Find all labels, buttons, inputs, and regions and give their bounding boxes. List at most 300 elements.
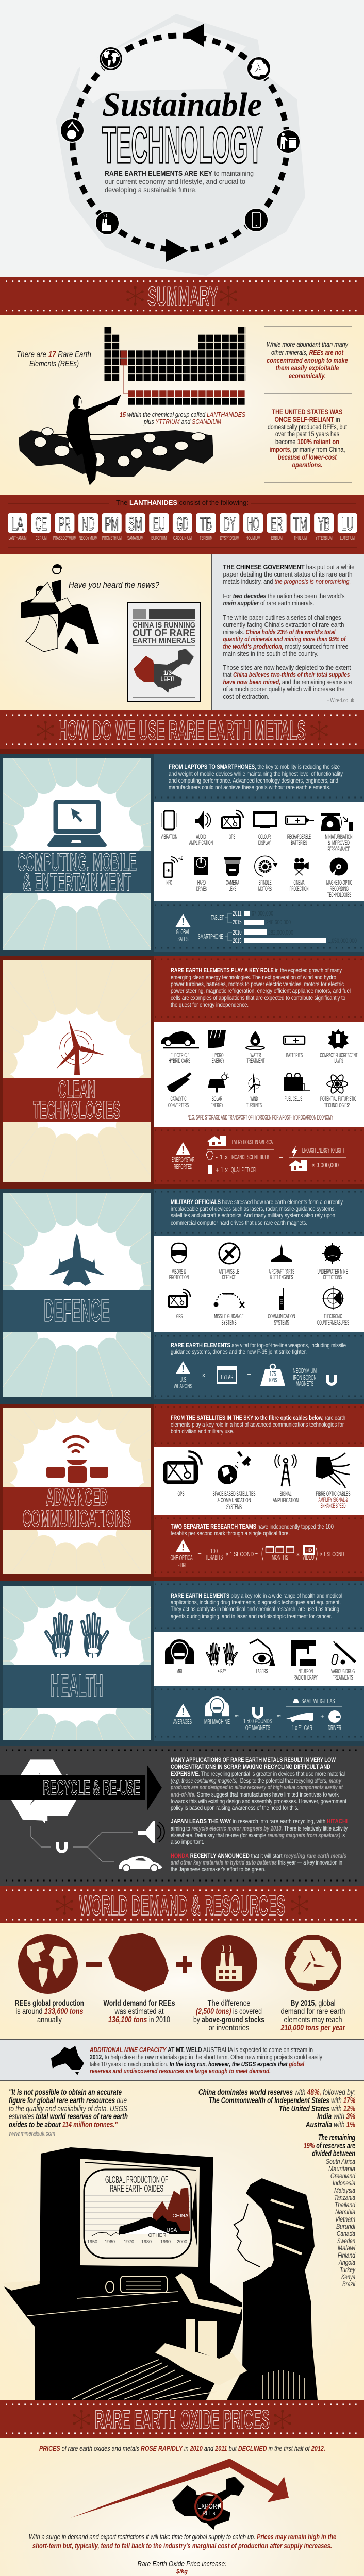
global sales chart: TABLET [211, 913, 224, 921]
reserves by country: Vietnam [335, 2215, 355, 2223]
section: advanced communications [0, 1404, 364, 1581]
summary decoration [127, 286, 143, 305]
mri equation: ≈ [235, 1712, 239, 1720]
tv screen chart: 1950 [87, 2239, 97, 2244]
icon: gps [168, 1289, 190, 1308]
element names: LANTHANUM [8, 535, 27, 541]
mri equation: + [320, 1713, 324, 1720]
energystar equation: REPORTED [174, 1163, 192, 1171]
australia band [0, 2039, 364, 2081]
icon: speaker [138, 1821, 164, 1843]
panel: defence [3, 1193, 151, 1397]
tv screen chart [84, 2170, 191, 2258]
recycle title arrow: RECYCLE & RE-USE [43, 1775, 140, 1800]
terabit text: terabits per second mark through a single optical fibre. [171, 1530, 290, 1537]
map: china [134, 649, 194, 693]
price chart title: Rare Earth Oxide Price increase: [137, 2560, 227, 2568]
icon: water drop [246, 1031, 264, 1050]
icon: solar [208, 1072, 229, 1092]
banner: how do we use rare earth metals [0, 710, 364, 754]
communications labels: SIGNAL [279, 1491, 292, 1497]
demand captions: REEs global production [15, 1999, 84, 2008]
fact: united states: operations. [292, 461, 323, 469]
communications icon grid [154, 1447, 364, 1515]
icon: calendar [217, 1366, 237, 1384]
fact: abundance: them easily exploitable [275, 364, 339, 372]
element names: EUROPIUM [151, 535, 167, 541]
icon: electric car [161, 1031, 199, 1048]
icon: radar [322, 1286, 344, 1310]
defence labels: AIRCRAFT PARTS [269, 1269, 294, 1275]
terabit equation: ONE OPTICAL [170, 1554, 195, 1562]
red lanthanide row [128, 390, 245, 397]
article text: cost of extraction. [223, 692, 269, 700]
price chart title [137, 2560, 227, 2575]
australia text: ADDITIONAL MINE CAPACITY AT MT. WELD AUSTRALIA is expected to come on stream in [89, 2046, 313, 2054]
demand captions: was estimated at [114, 2007, 164, 2016]
recycle text: policy is based upon raising awareness of the need for this. [171, 1804, 299, 1811]
decoration [56, 1896, 73, 1914]
woman hair [246, 2178, 315, 2272]
icon: phone [244, 208, 269, 232]
recycle text: also important. [171, 1838, 204, 1845]
defence labels: SYSTEMS [222, 1320, 237, 1326]
clean labels: LAMPS [334, 1058, 343, 1064]
clean labels: ENERGY [212, 1058, 224, 1064]
area: other [123, 2226, 171, 2234]
article text: the world's production, mostly sourced from three [223, 642, 349, 650]
communications title banner: ADVANCED [46, 1484, 108, 1511]
icon: nfc [164, 856, 183, 877]
terabit equation [170, 1539, 344, 1569]
recycle text: elsewhere. Defra say that re-use (for example reusing magnets from speakers) is [171, 1832, 345, 1839]
supply text [29, 2533, 336, 2550]
lanthanide connector [124, 365, 128, 394]
clean labels: HYDRO [212, 1053, 224, 1059]
clean labels: BATTERIES [286, 1053, 303, 1059]
clean labels [168, 1053, 358, 1109]
clean text: RARE EARTH ELEMENTS PLAY A KEY ROLE in the expected growth of many [171, 967, 342, 974]
recycle text: (e.g. those containing magnets). Despite the potential that recycling offers, many [171, 1777, 342, 1784]
tv bezel [80, 2159, 200, 2267]
icon: batteries [284, 1036, 305, 1044]
mri equation: DRIVER [328, 1724, 341, 1732]
map: china export ban: EXPORT [197, 2502, 220, 2510]
plus [176, 1956, 192, 1973]
global sales chart: SMARTPHONE [198, 933, 223, 940]
text: 17 REEs: There are 17 Rare Earth [16, 350, 91, 359]
section: defence [0, 1189, 364, 1404]
fact: united states [268, 408, 347, 469]
reserves by country: Thailand [335, 2200, 356, 2209]
news panel left [0, 554, 211, 710]
reserves by country: Sweden [337, 2236, 355, 2245]
section background [0, 1189, 364, 1404]
intro text: RARE EARTH ELEMENTS ARE KEY to maintaining [105, 170, 254, 177]
article text: metals industry, and the prognosis is not promising. [223, 578, 351, 585]
newspaper [128, 603, 200, 701]
computing title banner: & ENTERTAINMENT [23, 869, 131, 896]
intro text [105, 170, 254, 194]
element tiles: TM [293, 513, 307, 534]
mri equation: ≈ [277, 1712, 281, 1720]
icon: magnet [327, 1375, 336, 1384]
icon: neutron radiotherapy [291, 1640, 316, 1666]
health labels: MRI [176, 1669, 183, 1675]
fact: united states: become 100% reliant on [275, 438, 339, 446]
element tiles: PR [59, 513, 71, 534]
health labels: X-RAY [218, 1669, 226, 1675]
recycle title arrow [0, 1765, 162, 1811]
icon: cinema [294, 858, 308, 875]
icon: f1 car [286, 1713, 313, 1722]
illustration: crowd and speaker [19, 395, 213, 485]
heading: summary: SUMMARY [147, 282, 218, 312]
communications labels: GPS [177, 1491, 185, 1497]
article text: minerals. China holds 23% of the world's total [223, 628, 336, 636]
article text: - Wired.co.uk [327, 698, 354, 704]
defence equation: NEODYMIUM [293, 1367, 317, 1375]
computing labels: HARD [197, 880, 206, 886]
article text: main supplier of rare earth minerals. [223, 599, 315, 607]
computing text: manufacturers could not achieve these goals without rare earth elements. [169, 784, 330, 791]
reserves by country: Indonesia [333, 2179, 355, 2187]
global sales chart: 2015 [233, 937, 241, 944]
computing labels: SPINDLE [259, 880, 272, 886]
icon: globe large [18, 1934, 78, 1994]
reserves panel [0, 2081, 364, 2400]
article text: The white paper outlines a series of challenges [223, 614, 341, 621]
tv ledge [4, 2281, 178, 2316]
icon: weight: TONS [268, 1376, 277, 1384]
computing labels: AUDIO [196, 834, 206, 840]
clean labels: WATER [251, 1053, 261, 1059]
terabit equation: MONTHS [272, 1553, 288, 1561]
element names: DYSPROSIUM [220, 535, 239, 541]
recycle text: aiming to recycle electric motor magnets by 2013. There is relatively little activity [171, 1825, 348, 1832]
icon: helmet [328, 1710, 341, 1723]
lanthanide band [0, 495, 364, 554]
terabit equation: FIBRE [177, 1561, 188, 1569]
element tiles: LA [11, 513, 24, 534]
computing labels: RECHARGEABLE [287, 834, 311, 840]
health icon grid [154, 1632, 364, 1686]
tv screen chart: OTHER [148, 2233, 166, 2239]
global sales chart: 248,600,000 [266, 919, 291, 926]
defence title banner: DEFENCE [44, 1293, 110, 1329]
global sales chart [175, 909, 357, 944]
quote: usgs: oxides to be about 114 million tonnes." [9, 2121, 118, 2129]
quote: usgs [9, 2088, 128, 2137]
icon: lasers [250, 1639, 275, 1666]
communications labels: AMPLIFICATION [273, 1498, 299, 1504]
defence labels: COMMUNICATION [268, 1314, 295, 1320]
fact: abundance [267, 341, 349, 380]
terabit equation: × 1 SECOND [320, 1550, 344, 1558]
section: recycle and re-use [0, 1746, 364, 1886]
defence labels: & JET ENGINES [270, 1275, 293, 1281]
tv screen chart: 1980 [141, 2239, 152, 2244]
computing labels: DISPLAY [258, 840, 271, 846]
defence equation: WEAPONS [174, 1382, 192, 1390]
computing labels: NFC [166, 880, 172, 886]
element tiles: YB [318, 513, 330, 534]
terabit equation: x [296, 1550, 300, 1558]
reserves by country: Namibia [335, 2208, 355, 2216]
icon: nfc: -£ [166, 868, 171, 874]
tv screen chart: CHINA [172, 2213, 189, 2219]
reserves by country: China dominates world reserves with 48%, followed by: [198, 2088, 355, 2097]
icon: mri [165, 1639, 194, 1664]
icon: jet small [271, 1244, 292, 1262]
woman face [234, 2204, 260, 2267]
recycle background [0, 1746, 364, 1886]
map: china export ban: REEs [202, 2509, 216, 2517]
icon: globe [98, 46, 123, 71]
icon: fibre optics [316, 1453, 350, 1488]
icon: radio [279, 1288, 284, 1310]
communications labels: SYSTEMS [226, 1504, 242, 1511]
icon: rock [108, 1933, 169, 1992]
element tiles: DY [224, 513, 236, 534]
recycle text: and other key materials in hybrid auto batteries this year — a key innovation in [171, 1859, 342, 1866]
icon: weight [260, 1364, 285, 1386]
defence labels: PROTECTION [169, 1275, 189, 1281]
quote: usgs: "It is not possible to obtain an accurate [9, 2088, 122, 2097]
element names: NEODYMIUM [79, 535, 97, 541]
clean title banner: CLEAN [58, 1076, 95, 1104]
defence title banner [3, 1290, 151, 1332]
element tiles: SM [128, 513, 142, 534]
communications title banner: COMMUNICATIONS [23, 1505, 131, 1532]
terabit text: TWO SEPARATE RESEARCH TEAMS have independently topped the 100 [171, 1523, 334, 1530]
global sales chart: SALES [177, 935, 189, 943]
defence text: commercial computer hard drives that use rare earth magnets. [171, 1219, 307, 1226]
reserves by country: Turkey [340, 2265, 356, 2274]
icon: calendar: 1 YEAR [221, 1373, 233, 1381]
clean labels: ELECTRIC / [170, 1053, 189, 1059]
icon: gps [163, 1451, 202, 1484]
fact: united states: over the past 15 years has [275, 430, 339, 438]
communications text: both civilian and military use. [171, 1428, 234, 1435]
computing labels: MOTORS [258, 886, 272, 892]
mri equation: 1,500 POUNDS [243, 1717, 272, 1725]
panel: communications [3, 1408, 151, 1574]
energystar equation: QUALIFIED CFL [231, 1166, 257, 1174]
defence weapons text: guidance systems, drones and the new F-35 joint strike fighter. [171, 1348, 307, 1355]
icon: camera lens [224, 857, 241, 876]
health labels: LASERS [256, 1669, 268, 1675]
magnet flow diagram [31, 1821, 164, 1872]
element tiles: ND [82, 513, 95, 534]
icon: hydro [208, 1030, 226, 1048]
icon: calendars [266, 1547, 294, 1553]
ring arrow bottom [166, 239, 188, 262]
defence equation: MAGNETS [296, 1380, 313, 1387]
tv screen chart: 2000 [177, 2239, 187, 2244]
element names: PROMETHIUM [102, 535, 122, 541]
map: china export ban [172, 2477, 244, 2530]
quote: usgs: estimates total world reserves of rare earth [9, 2112, 128, 2121]
clean labels: TURBINES [246, 1103, 262, 1109]
icon: fuel cells [284, 1073, 310, 1091]
icon: visor [171, 1243, 187, 1263]
clean labels: TREATMENT [246, 1058, 265, 1064]
icon: satellite [46, 1436, 108, 1483]
demand captions: The difference [207, 1999, 251, 2008]
health labels: RADIOTHERAPY [294, 1675, 318, 1681]
icon: hard drive [194, 857, 208, 875]
australia text: reserves and undiscovered resources are large enough to meet demand. [90, 2067, 271, 2075]
defence labels: GPS [176, 1314, 183, 1320]
icon: recycle [246, 56, 271, 81]
tv screen chart: 1990 [160, 2239, 171, 2244]
section: clean technologies [0, 956, 364, 1189]
recycle text: HONDA RECENTLY ANNOUNCED that it will start recycling rare earth metals [171, 1852, 346, 1859]
computing labels: LENS [229, 886, 236, 892]
defence labels: SYSTEMS [274, 1320, 289, 1326]
health labels [176, 1669, 355, 1681]
icon: telephone [321, 813, 353, 831]
element names: THULIUM [294, 535, 307, 541]
element names: SAMARIUM [127, 535, 143, 541]
demand captions: (2,500 tons) is covered [196, 2007, 262, 2016]
communications labels: SPACE BASED SATELLITES [212, 1491, 256, 1497]
energystar equation: - 1 x [216, 1153, 228, 1161]
woman arm lap [155, 2343, 247, 2385]
health title banner: HEALTH [51, 1668, 103, 1704]
clean labels: FUEL CELLS [285, 1096, 302, 1103]
computing labels: VIBRATION [161, 834, 177, 840]
article text: THE CHINESE GOVERNMENT has put out a white [223, 563, 355, 571]
right facts [264, 327, 352, 482]
global sales chart: 282,000,000 [268, 929, 293, 936]
supply text: With a surge in demand and export restrictions it will take time for global supply to catch up. Prices may remain high in the [29, 2533, 336, 2541]
fact: abundance: economically. [289, 372, 326, 380]
mri equation: AVERAGES [173, 1718, 192, 1725]
tv screen chart: GLOBAL PRODUCTION OF [105, 2175, 168, 2185]
newspaper headline: CHINA IS RUNNING [133, 621, 195, 630]
computing text: FROM LAPTOPS TO SMARTPHONES, the key to mobility is reducing the size [169, 763, 340, 770]
icon: wind turbine [56, 1019, 105, 1075]
panel: computing [3, 758, 151, 950]
global sales chart: 2010 [233, 928, 241, 936]
article text: currently facing China's extraction of rare earth [223, 621, 344, 629]
icon: wind [248, 1071, 263, 1093]
reserves by country: South Africa [326, 2157, 355, 2165]
icon: spindle [255, 856, 278, 876]
mri equation: OF MAGNETS [245, 1724, 270, 1732]
communications labels [177, 1491, 351, 1511]
reserves by country: Australia with 1% [305, 2121, 355, 2129]
reserves by country: The United States with 12% [279, 2105, 355, 2113]
demand captions: By 2015, global [291, 1999, 335, 2008]
woman arm raised [175, 2273, 242, 2314]
clean icon grid [154, 1022, 364, 1127]
article text: paper detailing the current status of its rare earth [223, 570, 353, 578]
reserves by country: Malawi [338, 2244, 356, 2252]
icon: mine [322, 1243, 343, 1264]
fact: abundance: concentrated enough to make [267, 357, 348, 364]
element names: YTTERBIUM [316, 535, 333, 541]
reserves by country: Burundi [336, 2222, 356, 2230]
computing labels: BATTERIES [291, 840, 307, 846]
element names: GADOLINIUM [173, 535, 192, 541]
global sales chart: 2011 [233, 909, 241, 917]
computing labels: CAMERA [226, 880, 239, 886]
recycle text: the Japanese carmaker's effort to be green. [171, 1866, 266, 1873]
terabit equation: × 1 SECOND = [226, 1550, 258, 1558]
section background [0, 754, 364, 956]
icon: nfc: +£ [178, 856, 183, 861]
periodic table [104, 327, 245, 405]
defence equation [174, 1361, 336, 1390]
clean text [171, 967, 351, 1008]
energystar equation: EVERY HOUSE IN AMERICA [232, 1138, 273, 1146]
article text: main sites in the south of the country. [223, 650, 319, 657]
element tiles: HO [247, 513, 259, 534]
prices intro: PRICES of rare earth oxides and metals ROSE RAPIDLY in 2010 and 2011 but DECLINED in the first half of 2012. [39, 2445, 325, 2452]
computing icon grid [154, 802, 364, 901]
computing labels: CINEMA [294, 880, 305, 886]
demand captions: or inventories [208, 2024, 250, 2032]
chair slits [186, 2319, 217, 2359]
header [56, 14, 305, 276]
section: prices [0, 2400, 364, 2576]
communications title banner [3, 1484, 151, 1532]
computing title banner [3, 849, 151, 896]
lanthanide heading: The LANTHANIDES consist of the following: [116, 499, 249, 506]
tv controls [106, 2276, 167, 2293]
reserves by country: Angola [338, 2258, 355, 2266]
clean title banner [3, 1076, 151, 1124]
decoration [73, 2410, 90, 2429]
element names [8, 535, 355, 541]
icon: factory [95, 211, 120, 235]
element tiles: GD [176, 513, 188, 534]
demand captions: by above-ground stocks [193, 2015, 264, 2024]
clean title banner: TECHNOLOGIES [33, 1097, 120, 1124]
section: health [0, 1581, 364, 1746]
terabit equation: 100 [210, 1547, 218, 1555]
element tiles: TB [200, 513, 212, 534]
icon: magnet [58, 1842, 66, 1852]
health title banner [3, 1665, 151, 1708]
map: australia [51, 2046, 84, 2075]
terabit equation: VIDEO [302, 1553, 315, 1561]
element tiles: EU [153, 513, 165, 534]
health labels: NEUTRON [299, 1669, 313, 1675]
element names: HOLMIUM [246, 535, 260, 541]
mri equation: MRI MACHINE [204, 1718, 230, 1725]
tv cabinet [4, 2147, 242, 2400]
article text: For two decades the nation has been the world's [223, 592, 345, 600]
demand captions: is around 133,600 tons [15, 2007, 84, 2016]
demand captions: elements may reach [284, 2015, 342, 2024]
computing labels: AMPLIFICATION [189, 840, 213, 846]
icon: hd film [303, 1545, 315, 1555]
icon: xray hands [46, 1614, 107, 1658]
defence labels: VISORS & [172, 1269, 186, 1275]
section background [0, 1404, 364, 1581]
icon: mining [60, 118, 85, 143]
icon: mri white [205, 1696, 229, 1716]
icon: jet [49, 1234, 104, 1286]
energystar equation: + 1 x [216, 1166, 228, 1174]
title: Sustainable: Sustainable [102, 86, 262, 124]
health text [171, 1592, 342, 1620]
icon: vibration [161, 811, 177, 829]
